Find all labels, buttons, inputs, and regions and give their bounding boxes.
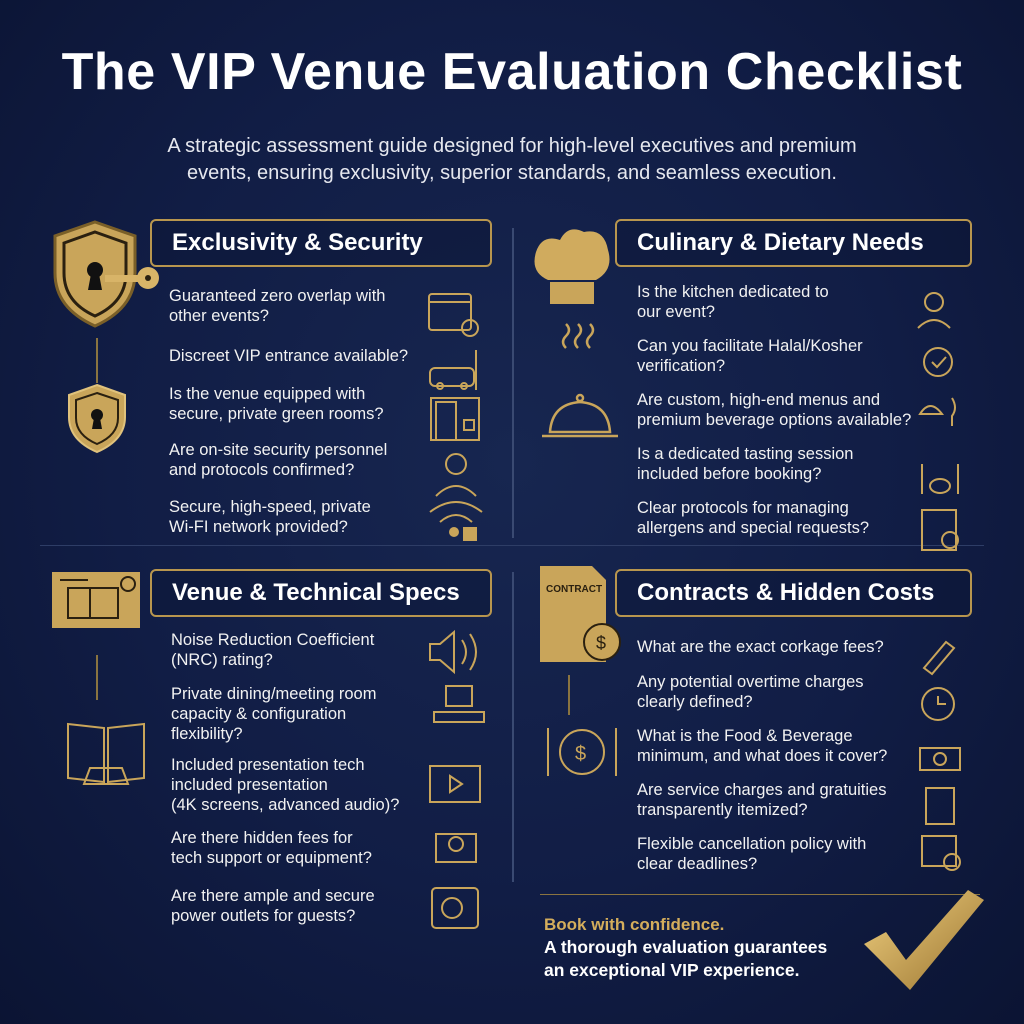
items: other events? [169,307,269,325]
panel: culinary & dietary needs: premium beverage options available? [637,411,911,429]
callout: book with confidence: A thorough evaluation guarantees [544,937,827,957]
panel: venue & technical specs: tech support or equipment? [171,849,372,867]
icons [428,293,479,390]
callout: book with confidence: Book with confidence. [544,915,724,934]
panel: contracts & hidden costs: clearly defined? [637,693,753,711]
items [637,283,829,321]
panel: exclusivity & security: Secure, high-speed, private [169,498,371,516]
icon: shield with key [54,220,159,328]
icon: plate with dollar: $ [575,743,586,765]
icons [429,630,485,929]
items: (NRC) rating? [171,651,273,669]
heading [615,569,972,617]
subtitle [167,135,857,184]
panel: venue & technical specs: capacity & configuration [171,705,346,723]
panel: exclusivity & security: secure, private green rooms? [169,405,384,423]
icon: plate with dollar [547,728,617,776]
items: What are the exact corkage fees? [637,638,884,656]
panel: venue & technical specs [52,569,492,929]
callout: book with confidence: an exceptional VIP experience. [544,960,800,980]
panel: contracts & hidden costs: Any potential overtime charges [637,673,864,691]
panel: contracts & hidden costs: Flexible cancellation policy with [637,835,866,853]
panel: exclusivity & security [54,219,492,541]
icon: gold checkmark [864,890,984,990]
heading: Venue & Technical Specs [172,579,460,606]
center divider [512,228,514,538]
panel: exclusivity & security: and protocols confirmed? [169,461,354,479]
panel: venue & technical specs: Included presentation tech [171,756,365,774]
panel: venue & technical specs: included presentation [171,776,328,794]
panel: contracts & hidden costs: What is the Food & Beverage [637,727,853,745]
icon: contract: $ [596,633,606,653]
panel: exclusivity & security: Wi-FI network provided? [169,518,348,536]
items [169,287,385,325]
panel: venue & technical specs: Are there hidden fees for [171,829,353,847]
panel: exclusivity & security: Discreet VIP entrance available? [169,347,408,365]
panel: culinary & dietary needs: Can you facilitate Halal/Kosher [637,337,863,355]
icons [919,640,961,871]
heading [150,569,492,617]
panel: culinary & dietary needs [534,219,972,551]
panel: culinary & dietary needs: included before booking? [637,465,821,483]
panel: contracts & hidden costs: transparently itemized? [637,801,808,819]
items: Guaranteed zero overlap with [169,287,385,305]
panel: venue & technical specs: Private dining/meeting room [171,685,376,703]
subtitle: events, ensuring exclusivity, superior standards, and seamless execution. [187,162,837,184]
subtitle: A strategic assessment guide designed for high-level executives and premium [167,135,857,157]
title: The VIP Venue Evaluation Checklist [62,43,962,101]
panel: venue & technical specs: (4K screens, advanced audio)? [171,796,399,814]
panel: venue & technical specs: Are there ample and secure [171,887,375,905]
panel: exclusivity & security: Are on-site security personnel [169,441,387,459]
panel: contracts & hidden costs: clear deadlines? [637,855,757,873]
panel: culinary & dietary needs: Clear protocols for managing [637,499,849,517]
panel: contracts & hidden costs: minimum, and what does it cover? [637,747,887,765]
heading: Contracts & Hidden Costs [637,579,934,606]
icon: contract [540,566,621,662]
items: Noise Reduction Coefficient [171,631,374,649]
icon: steam and cloche [542,323,618,438]
panel: culinary & dietary needs: allergens and special requests? [637,519,869,537]
items: Is the kitchen dedicated to [637,283,829,301]
items: our event? [637,303,715,321]
panel: venue & technical specs: flexibility? [171,725,243,743]
panel: exclusivity & security: Is the venue equipped with [169,385,365,403]
heading: Exclusivity & Security [172,229,423,256]
panel: culinary & dietary needs: Are custom, high-end menus and [637,391,880,409]
panel: culinary & dietary needs: Is a dedicated tasting session [637,445,853,463]
icon: blueprint [52,572,140,628]
divider above callout [540,894,980,895]
heading [615,219,972,267]
panel: contracts & hidden costs [540,566,972,873]
icon: floor plan book [67,722,145,785]
items [171,631,374,669]
panel: venue & technical specs: power outlets for guests? [171,907,355,925]
icon: chef hat [534,229,610,304]
icon: small shield [68,384,126,454]
heading [150,219,492,267]
icons [917,292,959,551]
panel: culinary & dietary needs: verification? [637,357,725,375]
icon: contract: CONTRACT [546,584,602,595]
callout: book with confidence [544,915,827,980]
panel: contracts & hidden costs: Are service charges and gratuities [637,781,886,799]
heading: Culinary & Dietary Needs [637,229,924,256]
